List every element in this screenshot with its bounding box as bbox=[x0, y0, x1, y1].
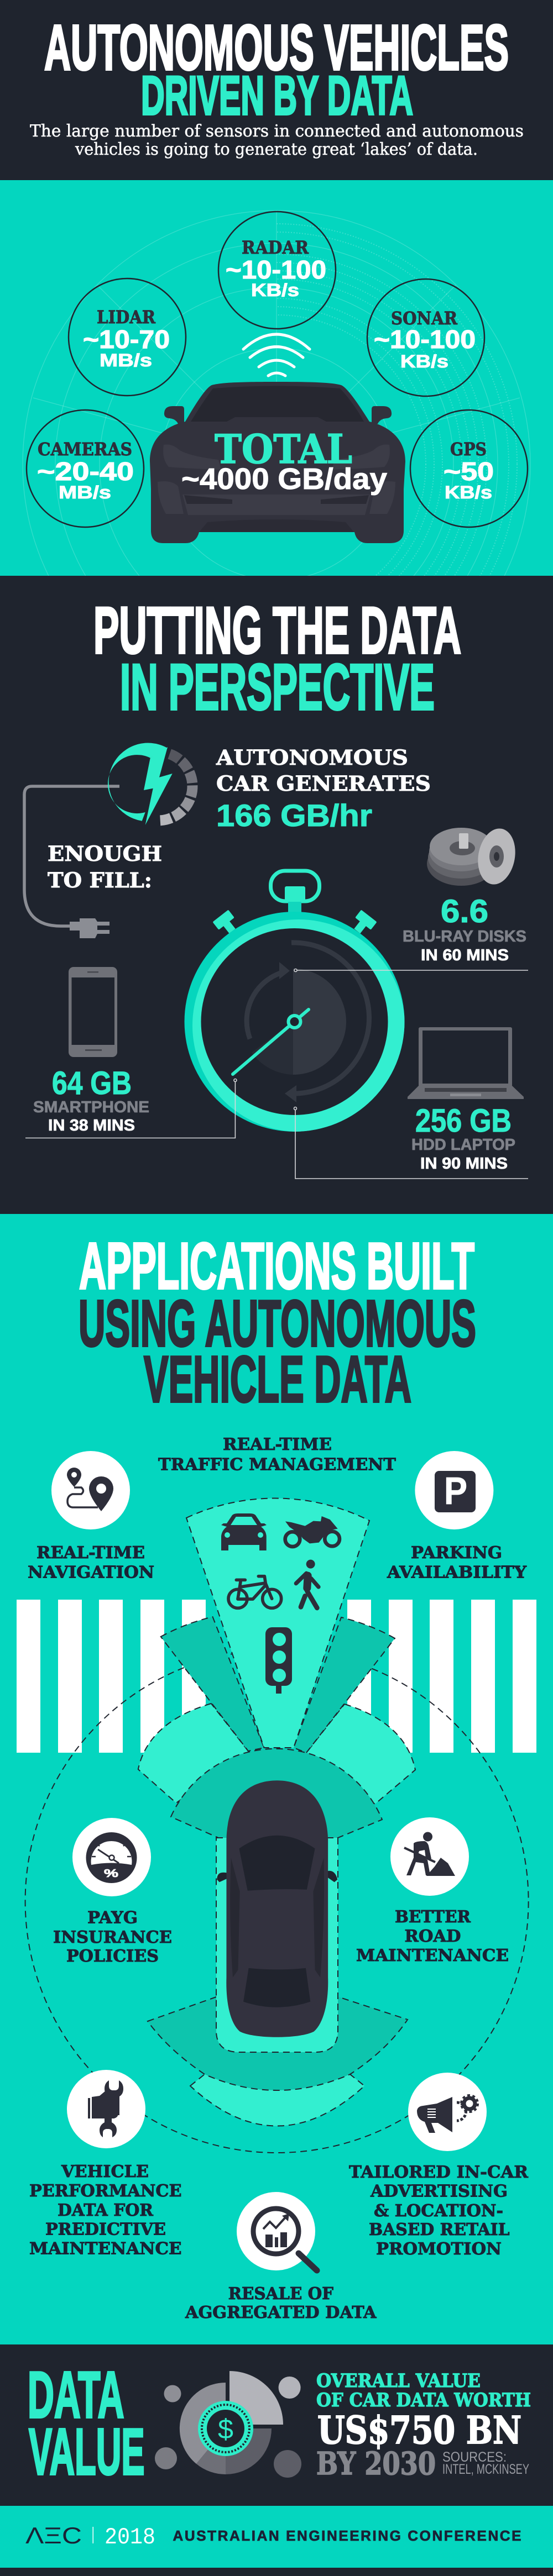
icon: power cable and plug bbox=[24, 786, 119, 938]
label: predictive maintenance: PERFORMANCE bbox=[29, 2181, 181, 2201]
sensor: sonar bbox=[367, 279, 484, 396]
sensor: lidar bbox=[69, 278, 186, 396]
sensor: gps: GPS bbox=[450, 439, 487, 460]
generates text: CAR GENERATES bbox=[216, 771, 431, 796]
icon: motorbike bbox=[285, 1516, 340, 1547]
car front bbox=[150, 382, 405, 543]
sources bbox=[442, 2449, 529, 2477]
label: advertising: BASED RETAIL bbox=[369, 2220, 510, 2239]
label: insurance bbox=[53, 1909, 172, 1966]
intro text bbox=[30, 122, 524, 159]
enough to fill: TO FILL: bbox=[48, 868, 152, 892]
label: advertising: ADVERTISING bbox=[370, 2181, 508, 2201]
connector: smartphone bbox=[25, 1079, 237, 1138]
dashed range circle bbox=[25, 1650, 529, 2153]
pie chart icon bbox=[155, 2371, 301, 2478]
icon: road worker bbox=[390, 1817, 469, 1896]
sensor: cameras: CAMERAS bbox=[38, 439, 132, 460]
total: ~4000 GB/day bbox=[181, 462, 387, 496]
logo: AEC 2018: 2018 bbox=[105, 2524, 155, 2551]
sensor: sonar: SONAR bbox=[391, 308, 457, 329]
icon: parking bbox=[415, 1451, 493, 1529]
value text: BY 2030 bbox=[316, 2446, 436, 2482]
logo: AEC 2018: ΛΞC bbox=[25, 2522, 82, 2548]
label: resale bbox=[185, 2284, 377, 2322]
label: predictive maintenance bbox=[29, 2162, 181, 2259]
crossing stripes bbox=[17, 1600, 536, 1753]
sensor: radar bbox=[218, 212, 336, 329]
sensor: gps bbox=[410, 410, 528, 527]
value text: OF CAR DATA WORTH bbox=[316, 2389, 531, 2411]
stopwatch bbox=[185, 871, 405, 1132]
label: navigation: NAVIGATION bbox=[28, 1563, 154, 1583]
blu-ray stat: 6.6 bbox=[441, 893, 488, 929]
panel: applications bbox=[0, 1214, 553, 2344]
total: TOTAL bbox=[215, 425, 352, 472]
label: predictive maintenance: DATA FOR bbox=[58, 2201, 154, 2220]
sensor: lidar: LIDAR bbox=[97, 307, 155, 328]
heading bbox=[79, 1229, 476, 1416]
value text: OVERALL VALUE bbox=[316, 2370, 481, 2392]
label: advertising: PROMOTION bbox=[376, 2239, 502, 2259]
enough to fill: ENOUGH bbox=[48, 842, 162, 866]
heading: DATA bbox=[28, 2358, 124, 2432]
conference name: AUSTRALIAN ENGINEERING CONFERENCE bbox=[173, 2527, 521, 2544]
icon: magnifier with chart bbox=[237, 2192, 317, 2270]
generates text bbox=[216, 745, 431, 833]
sensor: radar: RADAR bbox=[242, 237, 309, 258]
logo: AEC 2018 bbox=[25, 2522, 155, 2551]
label: road maintenance bbox=[356, 1907, 509, 1965]
icon: car bbox=[221, 1513, 267, 1550]
label: predictive maintenance: PREDICTIVE bbox=[45, 2220, 166, 2239]
label: traffic management: REAL-TIME bbox=[223, 1435, 332, 1454]
title bbox=[44, 12, 509, 126]
icon: blu-ray disks bbox=[427, 826, 519, 887]
smartphone stat: SMARTPHONE bbox=[33, 1098, 149, 1116]
icon: insurance gauge: % bbox=[104, 1868, 118, 1880]
sensor: cameras bbox=[27, 410, 144, 527]
laptop stat: 256 GB bbox=[415, 1103, 512, 1139]
laptop stat: HDD LAPTOP bbox=[411, 1136, 515, 1154]
generates text: AUTONOMOUS bbox=[216, 745, 408, 770]
label: parking bbox=[387, 1543, 527, 1583]
connector: blu-ray bbox=[294, 969, 528, 971]
icon: parking: P bbox=[444, 1469, 467, 1512]
blu-ray stat: BLU-RAY DISKS bbox=[403, 928, 526, 945]
sensor: sonar: ~10-100 bbox=[374, 325, 476, 354]
heading bbox=[93, 593, 461, 724]
icon: smartphone bbox=[69, 967, 117, 1057]
blu-ray stat bbox=[403, 893, 526, 964]
icon: wifi signal bbox=[243, 334, 310, 376]
laptop stat: IN 90 MINS bbox=[420, 1155, 508, 1173]
smartphone stat: 64 GB bbox=[52, 1065, 132, 1101]
sensor: gps: KB/s bbox=[445, 482, 492, 502]
sensor: lidar: ~10-70 bbox=[83, 325, 170, 354]
label: road maintenance: ROAD bbox=[405, 1927, 461, 1946]
label: navigation bbox=[28, 1543, 154, 1583]
icon: traffic management bbox=[221, 1513, 340, 1694]
enough to fill bbox=[48, 842, 162, 892]
panel: data value bbox=[0, 2344, 553, 2506]
car top view bbox=[217, 1780, 337, 2037]
sensor: cameras: ~20-40 bbox=[37, 457, 134, 486]
panel: footer bbox=[0, 2506, 553, 2576]
label: parking: PARKING bbox=[411, 1543, 502, 1563]
panel: header bbox=[0, 0, 553, 180]
label: advertising: TAILORED IN-CAR bbox=[349, 2163, 529, 2182]
sensor: lidar: MB/s bbox=[100, 350, 152, 370]
label: advertising bbox=[349, 2163, 529, 2259]
label: traffic management bbox=[158, 1435, 397, 1474]
label: insurance: INSURANCE bbox=[53, 1928, 172, 1947]
panel: sensors bbox=[0, 180, 553, 576]
value text bbox=[316, 2370, 531, 2482]
label: insurance: POLICIES bbox=[66, 1947, 159, 1966]
sensor: sonar: KB/s bbox=[400, 351, 448, 371]
label: navigation: REAL-TIME bbox=[36, 1543, 145, 1563]
label: resale: RESALE OF bbox=[228, 2284, 333, 2304]
heading bbox=[28, 2358, 145, 2489]
icon: laptop bbox=[408, 1027, 524, 1099]
label: resale: AGGREGATED DATA bbox=[185, 2303, 377, 2322]
total bbox=[181, 425, 387, 496]
label: road maintenance: BETTER bbox=[395, 1907, 471, 1927]
icon: wrench and hand bbox=[67, 2070, 145, 2148]
icon: pedestrian bbox=[296, 1560, 319, 1608]
panel: perspective bbox=[23, 606, 528, 1179]
label: insurance: PAYG bbox=[87, 1909, 138, 1928]
icon: insurance gauge bbox=[72, 1818, 151, 1896]
sensor: radar: KB/s bbox=[251, 280, 299, 300]
intro text: The large number of sensors in connected and autonomous bbox=[30, 122, 524, 141]
heading: VALUE bbox=[29, 2415, 145, 2489]
icon: navigation bbox=[51, 1451, 130, 1529]
connector: laptop bbox=[294, 1107, 528, 1179]
label: advertising: & LOCATION- bbox=[374, 2201, 503, 2221]
icon: megaphone and gears bbox=[408, 2073, 487, 2151]
sensor zones bbox=[138, 1499, 415, 2126]
blu-ray stat: IN 60 MINS bbox=[421, 947, 509, 964]
sensor: cameras: MB/s bbox=[59, 482, 111, 502]
pie chart icon: $ bbox=[218, 2414, 233, 2444]
smartphone stat bbox=[33, 1065, 149, 1134]
label: road maintenance: MAINTENANCE bbox=[356, 1946, 509, 1965]
smartphone stat: IN 38 MINS bbox=[48, 1117, 135, 1134]
icon: traffic light bbox=[265, 1627, 292, 1694]
icon: bicycle bbox=[228, 1576, 281, 1608]
icon: charge ring with lightning bolt bbox=[108, 738, 207, 835]
label: predictive maintenance: MAINTENANCE bbox=[29, 2239, 181, 2259]
sensor: radar: ~10-100 bbox=[226, 255, 326, 284]
generates text: 166 GB/hr bbox=[216, 798, 372, 833]
label: parking: AVAILABILITY bbox=[387, 1563, 527, 1583]
label: predictive maintenance: VEHICLE bbox=[61, 2162, 149, 2181]
sensor: gps: ~50 bbox=[444, 457, 494, 486]
laptop stat bbox=[411, 1103, 515, 1173]
label: traffic management: TRAFFIC MANAGEMENT bbox=[158, 1455, 397, 1474]
sources: SOURCES: bbox=[442, 2449, 507, 2465]
intro text: vehicles is going to generate great ‘lakes’ of data. bbox=[75, 140, 478, 159]
